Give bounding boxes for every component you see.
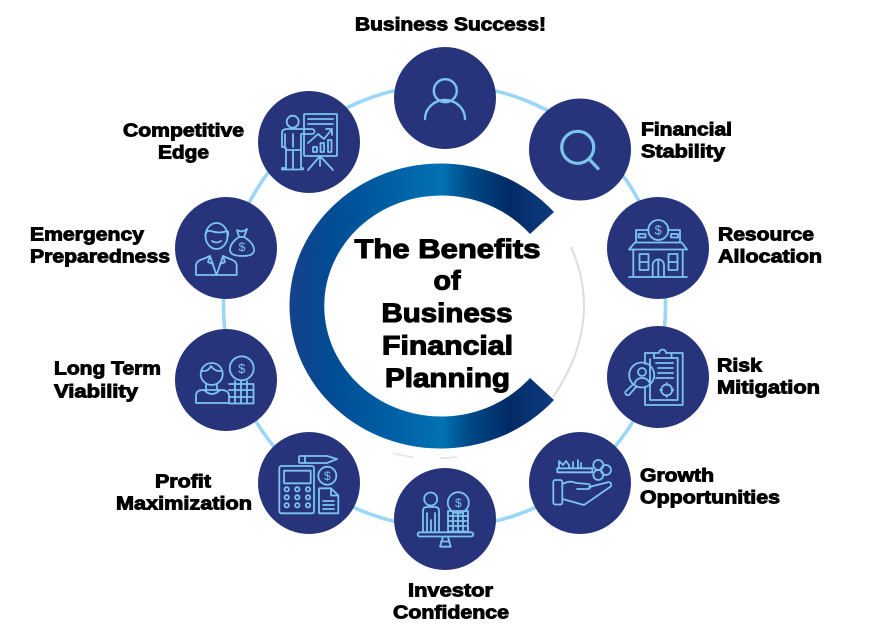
label: Investor Confidence: Confidence — [393, 602, 509, 622]
badge circle — [394, 47, 496, 149]
thin grey arc on right of centre ring — [553, 247, 584, 397]
icon: presenter with chart board — [282, 114, 337, 170]
label: Growth Opportunities — [640, 466, 780, 508]
badge circle — [607, 326, 709, 428]
node: Emergency Preparedness — [30, 197, 277, 299]
label: Resource Allocation — [718, 224, 822, 266]
label: Financial Stability: Financial — [641, 120, 732, 140]
icon: person with coin stack — [196, 356, 254, 404]
node: Resource Allocation — [607, 197, 822, 299]
badge circle — [529, 432, 631, 534]
label: Investor Confidence: Investor — [408, 580, 493, 600]
label: Risk Mitigation: Mitigation — [717, 378, 820, 398]
badge circle — [175, 329, 277, 431]
icon: calculator, pencil and document: $ — [324, 469, 331, 483]
label: Risk Mitigation: Risk — [717, 356, 763, 376]
badge circle — [529, 98, 631, 200]
centre title: of — [434, 266, 462, 296]
icon: calculator, pencil and document — [279, 456, 338, 513]
node: Profit Maximization — [116, 432, 360, 534]
node: Investor Confidence — [393, 468, 509, 622]
label: Growth Opportunities: Opportunities — [640, 488, 780, 508]
label: Emergency Preparedness: Emergency — [30, 224, 144, 244]
label: Emergency Preparedness — [30, 224, 170, 266]
label: Financial Stability: Stability — [641, 142, 725, 162]
node: Long Term Viability — [54, 329, 277, 431]
faint arc remnants under centre ring — [393, 453, 457, 458]
label: Profit Maximization: Profit — [155, 472, 211, 492]
icon: person with coin stack: $ — [238, 361, 246, 376]
label: Resource Allocation: Resource — [718, 224, 814, 244]
icon: person — [425, 79, 465, 119]
badge circle — [258, 432, 360, 534]
icon: clipboard with magnifier — [625, 350, 683, 405]
label: Growth Opportunities: Growth — [640, 466, 714, 486]
label: Competitive Edge: Competitive — [123, 120, 244, 140]
icon: person and coins on scale: $ — [455, 496, 462, 510]
label: Emergency Preparedness: Preparedness — [30, 246, 170, 266]
label: Business Success: Business Success! — [355, 14, 546, 34]
label: Resource Allocation: Allocation — [718, 246, 822, 266]
badge circle — [607, 197, 709, 299]
node: Risk Mitigation — [607, 326, 820, 428]
icon: businessman with money bag: $ — [239, 240, 246, 254]
outer connecting ring — [224, 85, 666, 527]
icon: bank building — [629, 220, 687, 277]
icon: magnifying glass — [562, 131, 598, 168]
node: Business Success — [355, 14, 546, 149]
label: Long Term Viability: Long Term — [54, 358, 161, 378]
icon: businessman with money bag — [196, 223, 254, 275]
node: Competitive Edge — [123, 91, 360, 193]
label: Competitive Edge — [123, 120, 244, 162]
badge circle — [175, 197, 277, 299]
label: Investor Confidence — [393, 580, 509, 622]
centre title: Planning — [385, 363, 510, 393]
centre title: Financial — [382, 330, 513, 360]
node: Financial Stability — [529, 98, 732, 200]
centre title — [354, 234, 540, 393]
centre title: Business — [382, 298, 512, 328]
label: Competitive Edge: Edge — [158, 142, 209, 162]
label: Profit Maximization: Maximization — [116, 494, 252, 514]
centre C-shaped gradient ring — [290, 163, 554, 448]
label: Financial Stability — [641, 120, 732, 162]
label: Profit Maximization — [116, 472, 252, 514]
label: Risk Mitigation — [717, 356, 820, 398]
node: Growth Opportunities — [529, 432, 780, 534]
badge circle — [394, 468, 496, 570]
label: Long Term Viability — [54, 358, 161, 402]
icon: person and coins on scale — [418, 492, 473, 547]
icon: bank building: $ — [655, 222, 663, 238]
centre title: The Benefits — [354, 234, 540, 264]
icon: hand with key — [553, 460, 611, 505]
label: Long Term Viability: Viability — [54, 382, 138, 402]
badge circle — [258, 91, 360, 193]
